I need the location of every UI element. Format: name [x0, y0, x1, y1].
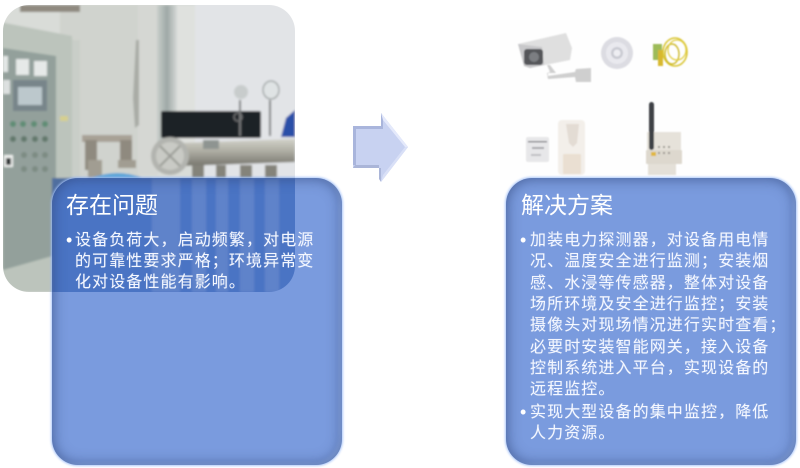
- panel: 存在问题: [52, 178, 342, 465]
- gauges: [234, 85, 248, 99]
- photo: water pump equipment room: [3, 5, 295, 292]
- panel: 解决方案: [506, 178, 796, 465]
- bullet text: 设备负荷大: •: [66, 230, 72, 250]
- bullet text: 加装电力探测器: 加装电力探测器，对设备用电情: [530, 232, 769, 249]
- icon: control module: [526, 137, 549, 162]
- heading: 解决方案: 解决方案: [521, 192, 613, 218]
- dark base below panel top: [52, 178, 297, 296]
- bullet text: 加装电力探测器: 必要时安装智能网关，接入设备: [530, 339, 769, 356]
- bullet text: 加装电力探测器: 控制系统进入平台，实现设备的: [530, 360, 769, 377]
- bullet text: 设备负荷大: 化对设备性能有影响。: [75, 274, 246, 291]
- bullet text: 加装电力探测器: 感、水浸等传感器，整体对设备: [530, 275, 769, 292]
- bullet text: 设备负荷大: 的可靠性要求严格；环境异常变: [75, 253, 314, 270]
- bullet text: 设备负荷大: [66, 230, 314, 291]
- bullet text: 实现大型设备的集中监控: [520, 402, 769, 442]
- black tanks: [161, 111, 261, 138]
- cabinet body: [0, 22, 72, 292]
- bullet text: 实现大型设备的集中监控: •: [520, 402, 526, 422]
- bullet text: 加装电力探测器: •: [520, 230, 526, 250]
- main pipe: [180, 139, 295, 166]
- heading: 存在问题: 存在问题: [66, 192, 158, 218]
- icon: infrared detector: [558, 120, 585, 175]
- bullet text: 实现大型设备的集中监控: 实现大型设备的集中监控，降低: [530, 404, 769, 421]
- device images: [518, 32, 689, 176]
- bullet text: 加装电力探测器: 场所环境及安全进行监控；安装: [530, 296, 769, 313]
- arrow: [353, 113, 408, 182]
- icon: security camera: [518, 33, 591, 82]
- icon: smart gateway with antenna: [646, 102, 682, 175]
- pipes left: [82, 135, 132, 142]
- vertical pump pipes under main pipe: [192, 165, 277, 179]
- bullet text: 加装电力探测器: [520, 230, 787, 398]
- icon: smoke sensor: [601, 37, 633, 69]
- bullet text: 设备负荷大: 设备负荷大，启动频繁，对电源: [75, 232, 314, 249]
- bullet text: 加装电力探测器: 况、温度安全进行监测；安装烟: [530, 253, 769, 270]
- bullet text: 加装电力探测器: 远程监控。: [530, 381, 616, 398]
- icon: water sensor with yellow cable: [653, 38, 687, 66]
- bullet text: 实现大型设备的集中监控: 人力资源。: [530, 425, 616, 442]
- bullet text: 加装电力探测器: 摄像头对现场情况进行实时查看；: [530, 317, 787, 334]
